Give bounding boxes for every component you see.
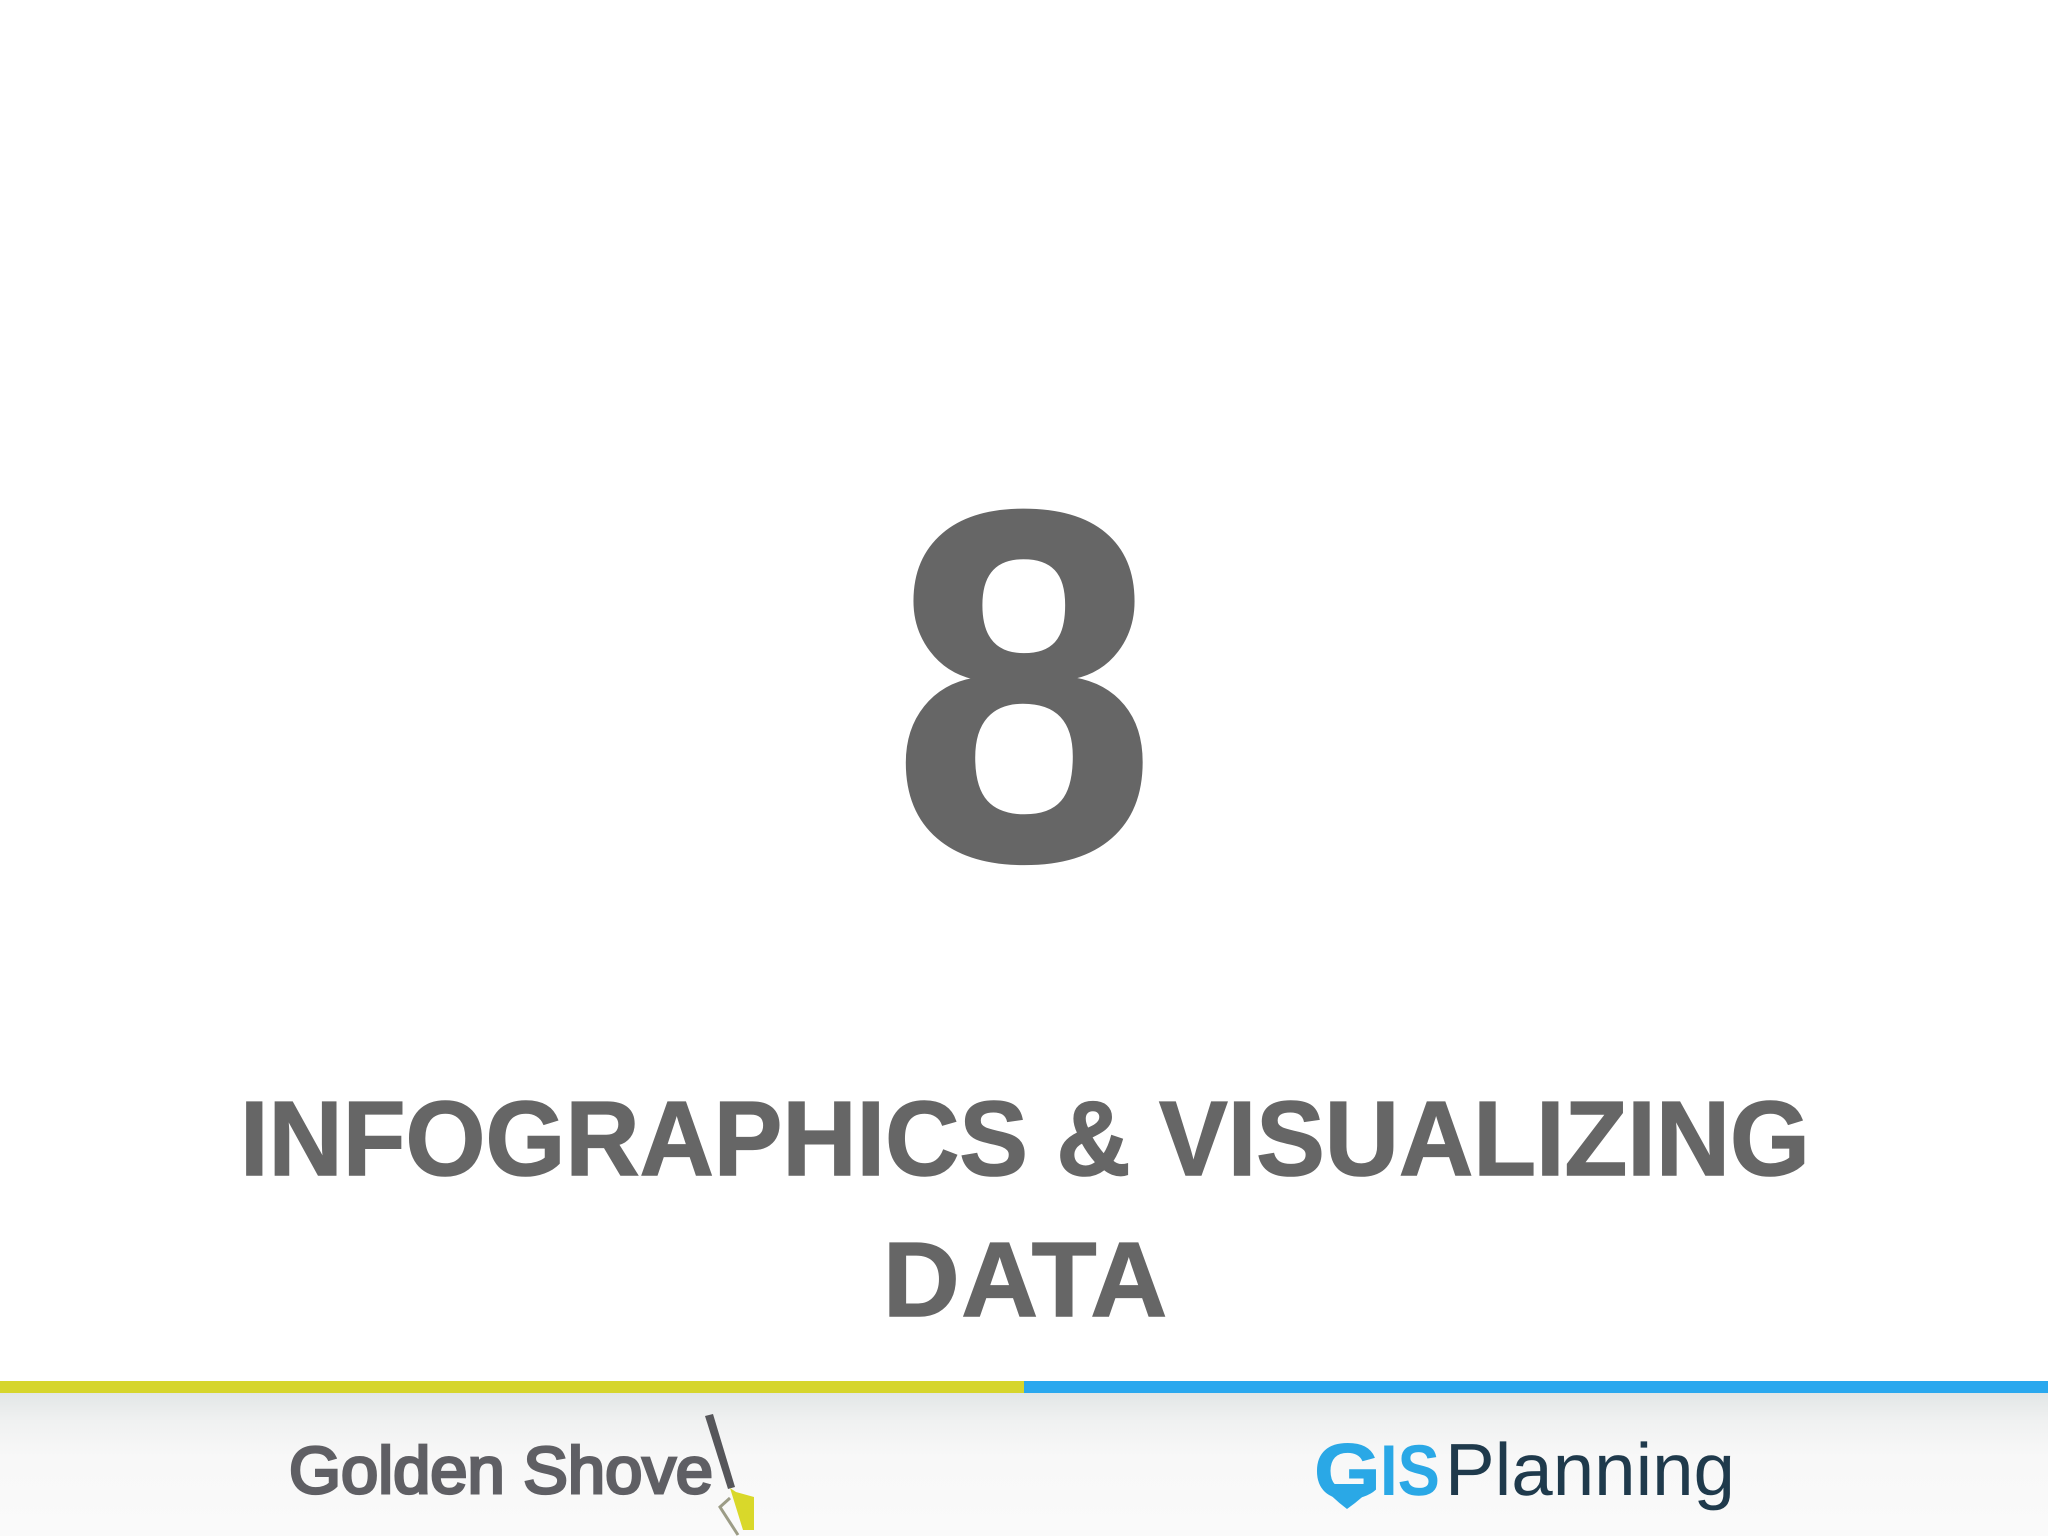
- logo: GIS Planning: Planning: [1445, 1428, 1735, 1511]
- footer rule: blue: [1024, 1381, 2048, 1393]
- logo: Golden Shovel: [289, 1414, 754, 1535]
- footer rule: yellow: [0, 1381, 1024, 1393]
- logo: GIS Planning: G: [1314, 1427, 1381, 1515]
- footer band: [0, 1393, 2048, 1536]
- logo: GIS Planning: IS: [1380, 1431, 1440, 1511]
- logo: GIS Planning: [1314, 1427, 1735, 1515]
- logo: Golden Shovel: Golden Shove: [289, 1433, 713, 1507]
- section number: 8: [892, 406, 1156, 965]
- section title: [240, 1080, 1810, 1339]
- section title: INFOGRAPHICS & VISUALIZING: [240, 1080, 1810, 1198]
- section title: DATA: [883, 1221, 1167, 1339]
